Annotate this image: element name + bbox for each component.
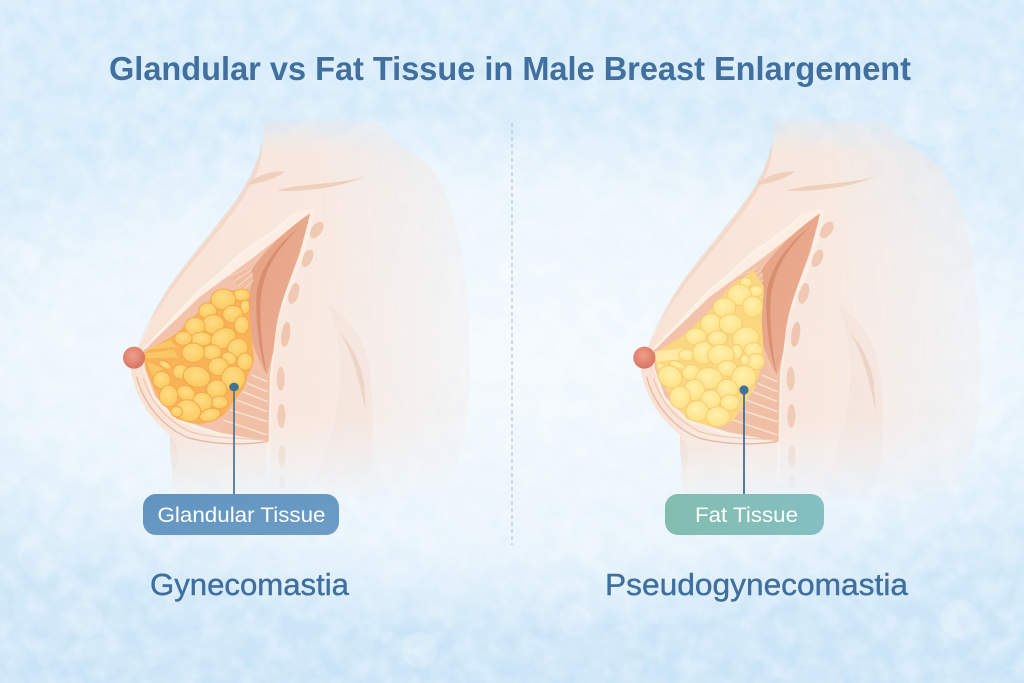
label: glandular tissue: Glandular Tissue [158,504,326,527]
label: glandular tissue [143,494,339,535]
heading: gynecomastia: Gynecomastia [150,567,350,602]
heading: pseudogynecomastia: Pseudogynecomastia [605,567,909,602]
glandular tissue mass [143,289,254,425]
leader line: fat tissue [739,385,749,495]
leader line: glandular tissue [229,383,239,495]
label: fat tissue [665,494,824,535]
panel: gynecomastia illustration [123,120,470,500]
label: fat tissue: Fat Tissue [695,504,798,527]
center divider [511,123,513,545]
panel: pseudogynecomastia illustration [633,120,980,500]
nipple [633,347,655,369]
fat tissue mass [654,271,764,427]
nipple [123,347,145,369]
title: Glandular vs Fat Tissue in Male Breast Enlargement [109,50,911,87]
